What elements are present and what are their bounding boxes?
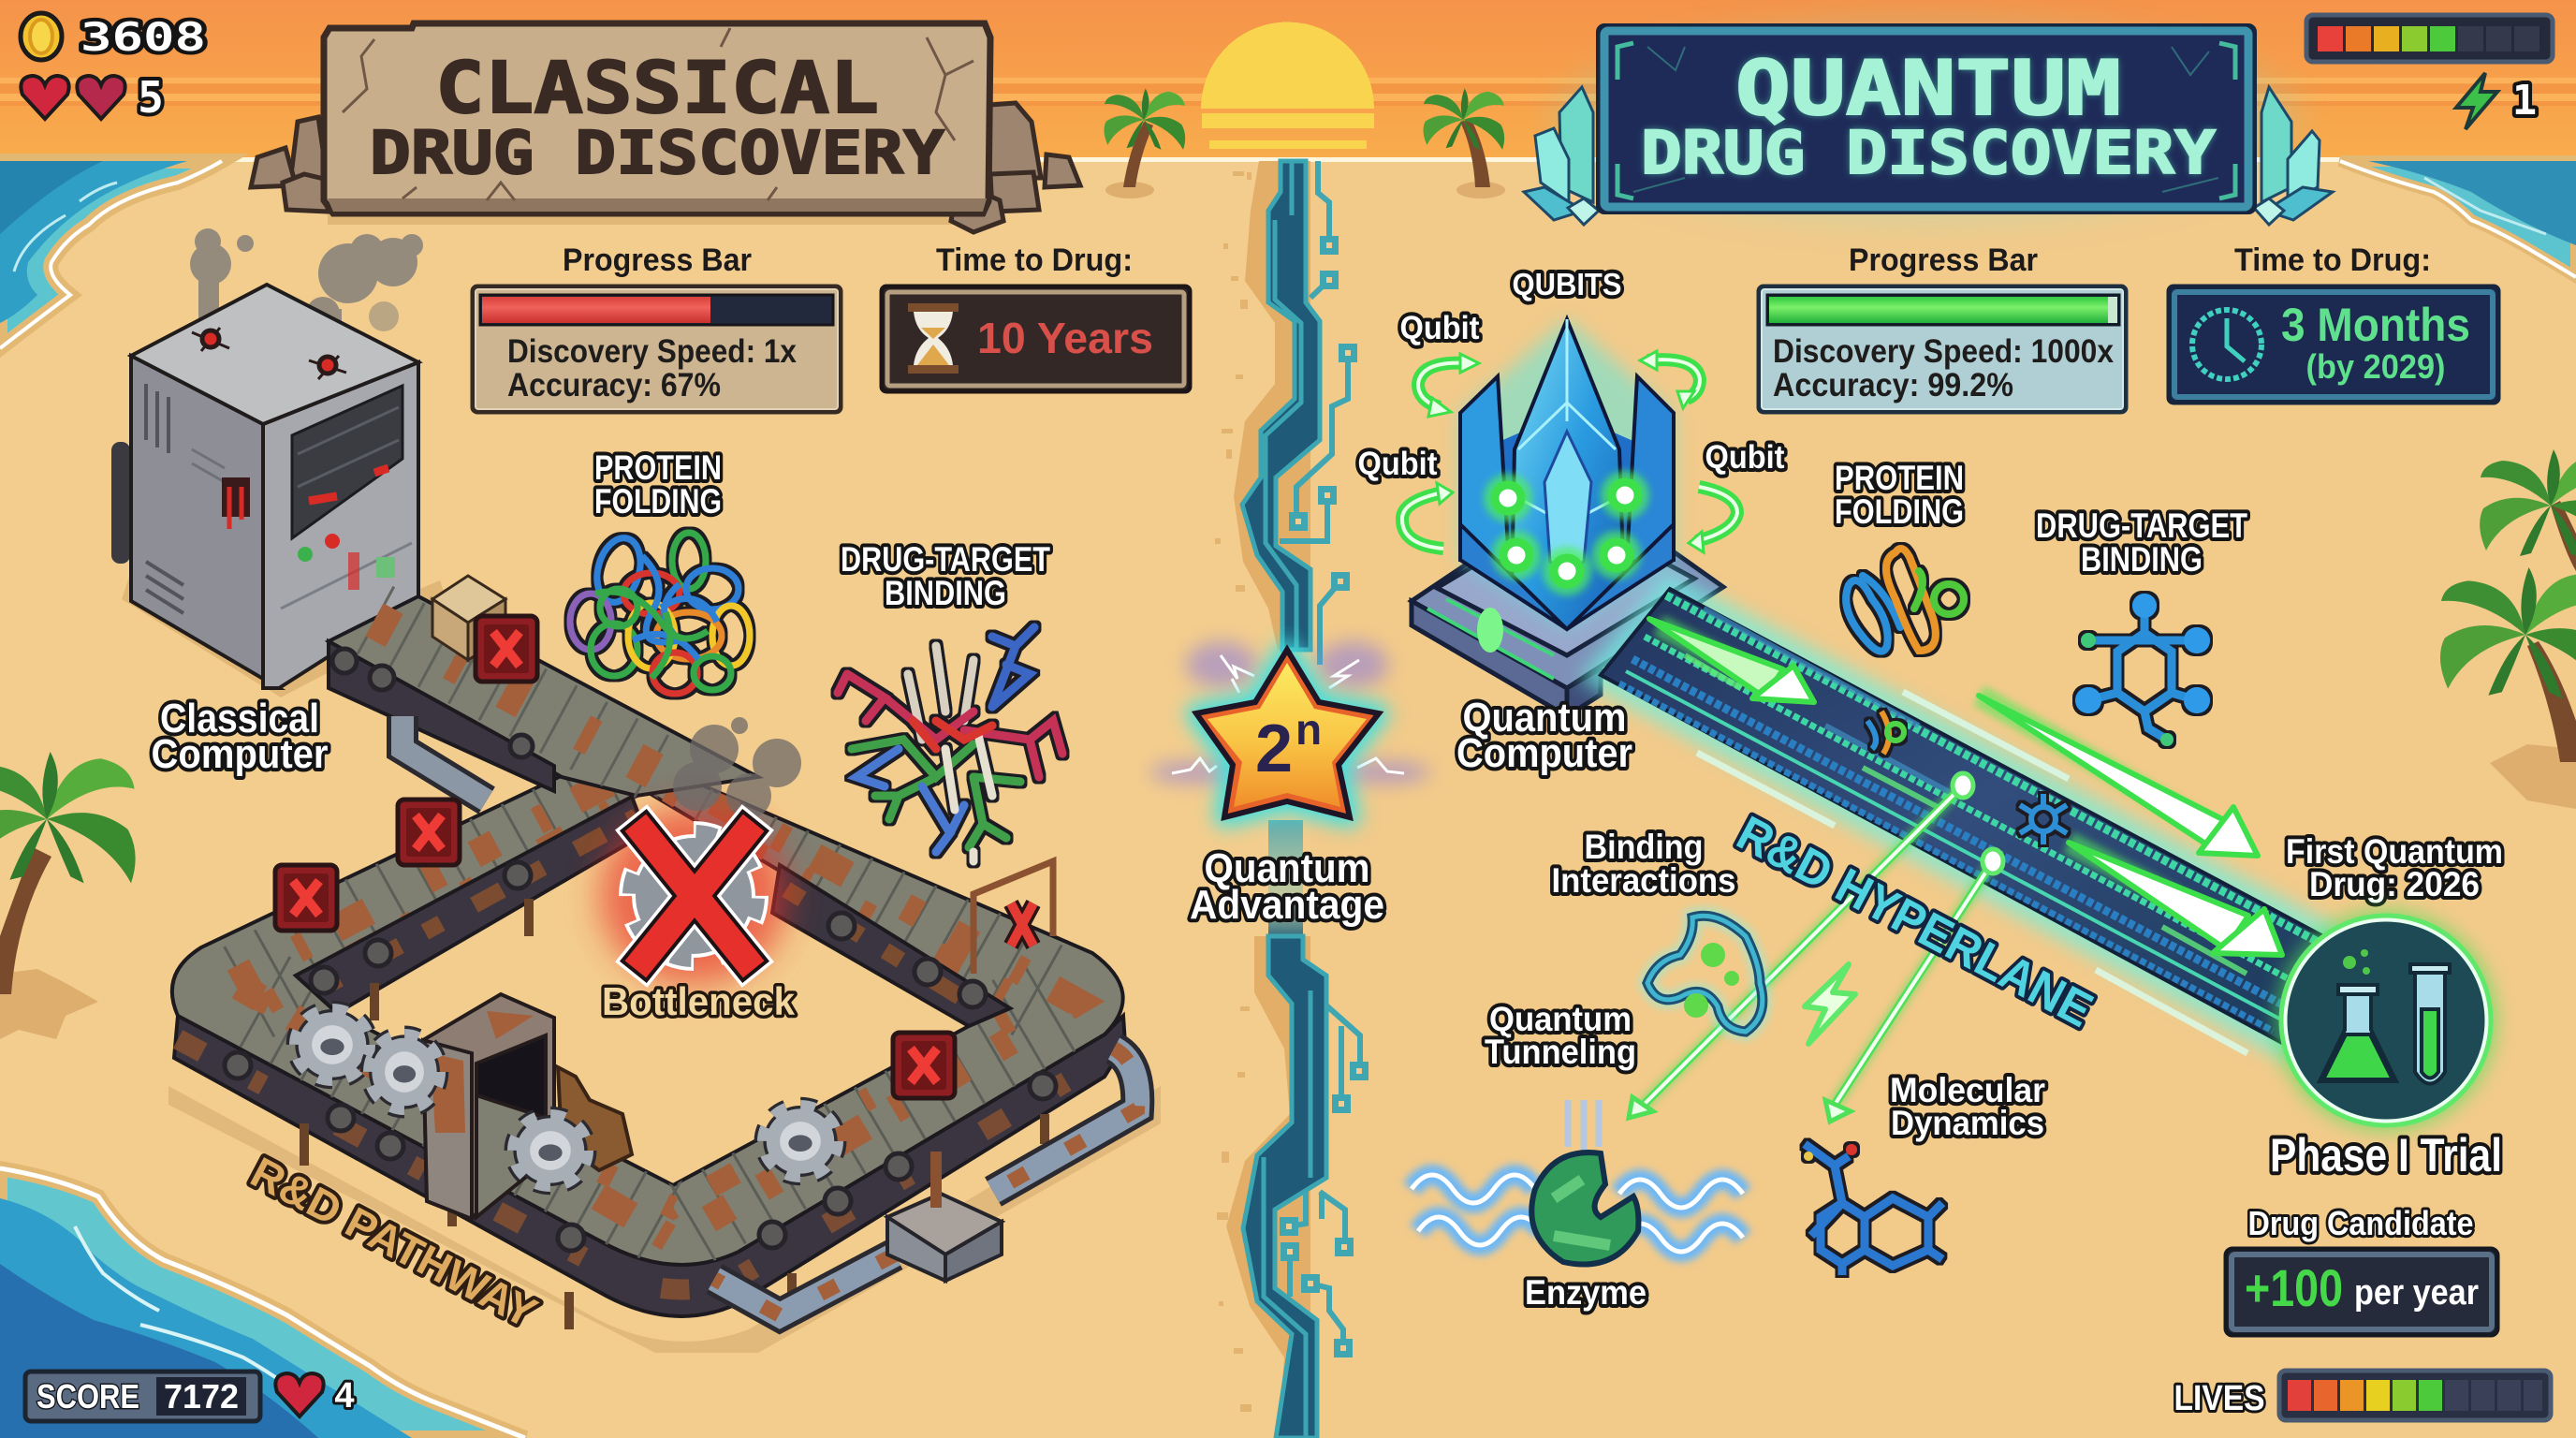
arrow lower <box>2069 843 2282 955</box>
label: protein folding quantum: FOLDING <box>1835 492 1964 531</box>
ocean top-left <box>0 161 222 348</box>
label: quantum computer: Computer <box>1456 730 1632 776</box>
HUD: coins <box>21 13 206 60</box>
mini molecule <box>2020 794 2067 844</box>
HUD: lightning count <box>2456 73 2537 129</box>
drug candidate panel: +100 <box>2245 1258 2343 1317</box>
label: quantum tunneling: Tunneling <box>1485 1033 1636 1071</box>
pipe control box <box>887 1152 1002 1281</box>
arrow in lane <box>1649 619 1814 702</box>
title sign: classical: DRUG DISCOVERY <box>370 119 944 187</box>
upper belt from computer <box>329 596 758 796</box>
arrow upper <box>1979 696 2258 856</box>
title text: QUANTUM <box>1735 45 2121 132</box>
parcel <box>432 576 505 660</box>
icon: tangled molecules <box>838 627 1062 861</box>
title sign: quantum: DRUG DISCOVERY <box>1641 119 2216 187</box>
time panel: quantum: 3 Months <box>2281 299 2470 351</box>
spin arrow top-right <box>1640 351 1700 408</box>
label: binding interactions: Interactions <box>1552 861 1735 900</box>
inner side bands <box>296 797 646 1013</box>
right pipe <box>714 1049 1137 1315</box>
gears on belt <box>297 1011 368 1078</box>
belt surface <box>172 749 1123 1265</box>
star glow <box>1196 650 1379 817</box>
label: drug-target binding classical: DRUG-TARGET <box>841 540 1050 579</box>
crystal shards <box>1460 319 1674 629</box>
palm trees: right edge <box>2440 449 2576 809</box>
progress bar track <box>480 295 833 325</box>
label: drug-target binding quantum: BINDING <box>2081 540 2203 579</box>
side sparks <box>1149 641 1430 784</box>
vent holes <box>192 328 346 379</box>
belt legs <box>304 899 1045 1329</box>
phase I trial badge <box>2276 910 2496 1131</box>
rollers <box>225 649 1056 1251</box>
label: binding interactions: Binding <box>1584 828 1704 866</box>
palm tree: left edge <box>0 752 136 1039</box>
label: protein folding classical: PROTEIN <box>594 448 722 487</box>
drug candidate panel <box>2226 1249 2497 1335</box>
HUD: score: 7172 <box>164 1377 239 1416</box>
label: drug candidate: Drug Candidate <box>2248 1204 2473 1242</box>
classical computer <box>111 228 449 697</box>
nodes <box>1953 773 2003 873</box>
label: qubit 3: Qubit <box>1705 439 1785 476</box>
stats: Discovery Speed: 1x <box>507 333 797 370</box>
2^n: 2 <box>1255 712 1293 786</box>
test tube <box>2410 964 2450 1084</box>
circuit divider bottom <box>1226 820 1368 1438</box>
label: protein folding classical: FOLDING <box>594 482 722 521</box>
label: qubit 1: Qubit <box>1400 310 1480 346</box>
branch line glow <box>1640 785 1993 1108</box>
progress panel: quantum: Progress Bar <box>1849 242 2038 278</box>
bottleneck <box>600 717 801 1023</box>
progress panel: classical <box>473 242 841 412</box>
lane stripes <box>1619 595 2320 1031</box>
HUD: hearts <box>21 72 164 123</box>
title glow <box>1641 45 2216 187</box>
label: Bottleneck <box>602 979 796 1023</box>
icon: lightning <box>1805 964 1855 1044</box>
bubbles <box>2343 949 2370 975</box>
dark plaque <box>1599 26 2254 212</box>
label: classical computer: Classical <box>160 696 319 741</box>
belt slats <box>234 763 1076 1240</box>
HUD: lightning count: 1 <box>2512 77 2537 125</box>
spin arrow bottom-left <box>1402 483 1453 549</box>
progress panel: classical: Progress Bar <box>563 242 752 278</box>
rocks right of sign <box>951 103 1080 232</box>
blocked markers <box>476 616 537 682</box>
flask <box>2320 985 2396 1081</box>
label: drug-target binding quantum: DRUG-TARGET <box>2036 506 2247 545</box>
branch arrowheads <box>1629 1097 1851 1122</box>
HUD: energy bar <box>2306 15 2553 62</box>
outer side band <box>174 1016 1125 1316</box>
icon: hourglass <box>908 303 959 374</box>
label: protein folding quantum: PROTEIN <box>1835 459 1964 497</box>
handle <box>111 442 130 564</box>
big X <box>644 833 745 959</box>
drug candidate panel: per year <box>2354 1273 2479 1313</box>
label: qubit 2: Qubit <box>1357 446 1438 482</box>
crystals left <box>1524 87 1599 225</box>
label: quantum advantage: Advantage <box>1190 882 1384 928</box>
progress bar track <box>1767 295 2119 325</box>
upper belt side <box>329 641 554 791</box>
tower sides <box>131 356 279 688</box>
label: drug-target binding classical: BINDING <box>885 574 1006 612</box>
vents <box>146 384 183 613</box>
waves glow <box>1412 1175 1743 1252</box>
progress panel: quantum <box>1759 242 2126 412</box>
label: qubits: QUBITS <box>1513 267 1621 301</box>
icon: binding pocket <box>1647 916 1763 1032</box>
HUD: lives <box>2174 1371 2551 1420</box>
R&D hyperlane <box>1601 589 2323 1122</box>
circuit divider top <box>1234 161 1357 665</box>
label: quantum advantage: Quantum <box>1204 845 1370 891</box>
spin arrow bottom-right <box>1689 487 1737 552</box>
HUD: coins: 3608 <box>80 14 206 60</box>
crystal base fill <box>1460 412 1674 629</box>
quantum advantage star <box>1149 641 1430 817</box>
arrow glow <box>1659 625 2247 936</box>
HUD: score <box>25 1372 260 1421</box>
icon: tangled protein <box>570 533 750 694</box>
rust pile <box>558 1067 632 1170</box>
smoke <box>673 717 801 818</box>
ocean top-right <box>2340 161 2576 277</box>
label: R&D pathway: R&D PATHWAY <box>243 1147 545 1338</box>
lane glow <box>1601 589 2323 1043</box>
label: molecular dynamics: Molecular <box>1890 1071 2045 1109</box>
title glow: QUANTUM <box>1735 45 2121 132</box>
star body <box>1196 650 1379 817</box>
title sign: classical <box>251 23 1080 232</box>
label: first quantum drug: Drug: 2026 <box>2309 865 2480 903</box>
lane body <box>1601 589 2323 1043</box>
label: phase I trial: Phase I Trial <box>2270 1129 2502 1181</box>
label: molecular dynamics: Dynamics <box>1891 1104 2044 1142</box>
crystal glow <box>1460 319 1674 629</box>
icon: clock <box>2192 310 2261 379</box>
streaks beside lane <box>1697 692 2247 1053</box>
label: classical computer: Computer <box>152 731 328 777</box>
icon: ordered molecule <box>2075 594 2210 746</box>
HUD: score: SCORE <box>37 1377 139 1416</box>
gate arch <box>423 994 554 1219</box>
icon: molecular structure <box>1804 1144 1942 1275</box>
time panel: classical: 10 Years <box>977 314 1153 362</box>
ocean bottom-left <box>0 1168 525 1438</box>
quantum advantage star: n <box>1295 705 1322 754</box>
label: enzyme: Enzyme <box>1525 1273 1647 1312</box>
spin arrow top-left <box>1418 354 1479 417</box>
drive bays <box>292 386 402 538</box>
palm tree: top left <box>1105 88 1185 198</box>
time panel: quantum: (by 2029) <box>2306 347 2445 386</box>
hanging gate X <box>973 861 1053 974</box>
time panel: quantum: Time to Drug: <box>2234 242 2431 278</box>
smoke plumes <box>190 228 423 360</box>
title sign: quantum <box>1524 19 2333 225</box>
stats: Accuracy: 99.2% <box>1773 367 2013 404</box>
time panel: quantum <box>2169 242 2498 403</box>
left pipe <box>402 716 487 800</box>
HUD: hearts: 5 <box>138 72 164 123</box>
mini protein <box>1867 712 1904 754</box>
branch lines <box>1640 785 1993 1108</box>
HUD: bottom heart: 4 <box>334 1376 355 1416</box>
ground shadow <box>168 1086 1161 1353</box>
rocks left of sign <box>251 117 328 212</box>
tunneling beams <box>1568 1100 1599 1152</box>
stone plaque <box>324 23 990 213</box>
waves core <box>1412 1175 1743 1252</box>
sun <box>1201 22 1374 149</box>
time panel: classical <box>882 242 1190 391</box>
enzyme body <box>1531 1152 1638 1265</box>
quantum computer <box>1402 319 1737 629</box>
label: quantum computer: Quantum <box>1462 695 1627 741</box>
qubit glow <box>1484 471 1649 595</box>
gear <box>632 834 755 958</box>
palm tree: top right <box>1424 88 1505 198</box>
enzyme with tunneling waves <box>1412 1100 1743 1265</box>
HUD: bottom heart <box>275 1373 355 1416</box>
R&D conveyor pathway <box>168 576 1161 1353</box>
title text: CLASSICAL <box>435 46 879 129</box>
label: quantum tunneling: Quantum <box>1489 1000 1632 1038</box>
icon: ordered protein <box>1846 549 1964 652</box>
crystals right <box>2254 87 2333 225</box>
qubit dots <box>1495 482 1638 584</box>
HUD: lives: LIVES <box>2174 1379 2265 1418</box>
time panel: classical: Time to Drug: <box>936 242 1133 278</box>
stats: Accuracy: 67% <box>507 367 721 404</box>
label: first quantum drug: First Quantum <box>2286 832 2503 871</box>
quantum computer platform <box>1412 487 1723 716</box>
stats: Discovery Speed: 1000x <box>1773 333 2114 370</box>
title glow: DRUG DISCOVERY <box>1641 119 2216 187</box>
label: R&D hyperlane: R&D HYPERLANE <box>1728 806 2101 1038</box>
red lights <box>222 477 250 517</box>
